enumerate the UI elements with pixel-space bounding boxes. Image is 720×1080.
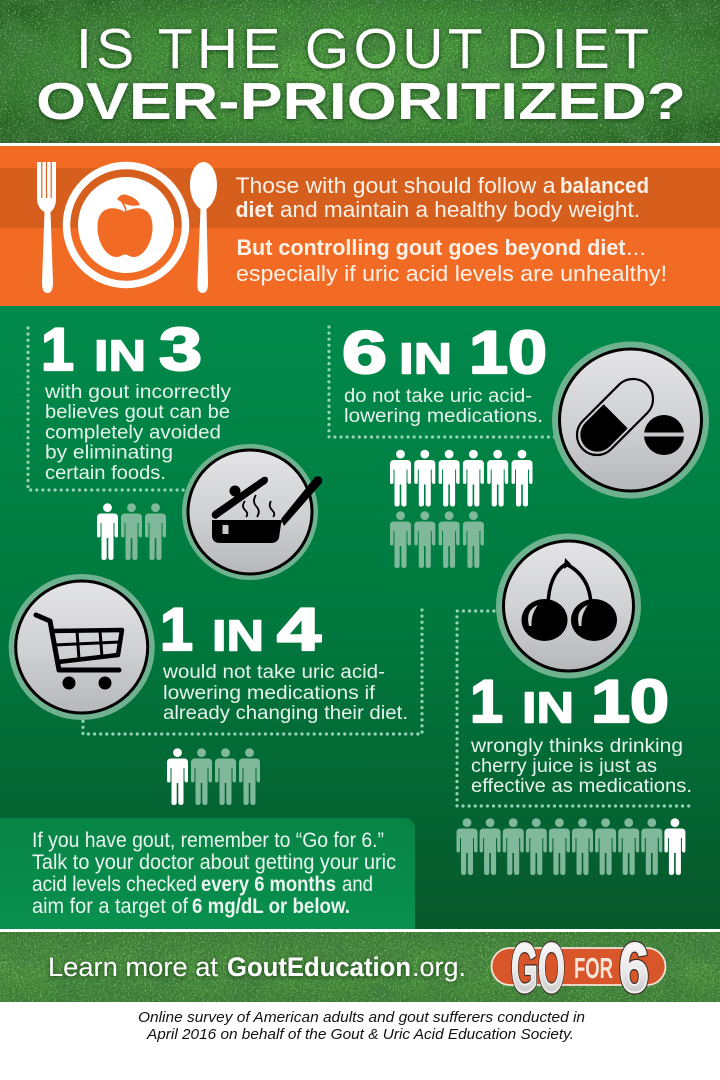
people: 6 of 10 bbox=[390, 450, 532, 568]
stat: 1 in 3 bbox=[41, 316, 322, 580]
number: 1 in 10: IN bbox=[522, 684, 574, 732]
stat: 1 in 10 bbox=[456, 534, 692, 875]
text block: 1 in 4 description: already changing their diet. bbox=[163, 703, 408, 724]
panel: orange intro bbox=[0, 146, 720, 306]
panel: green statistics bbox=[0, 306, 720, 929]
text block: 6 in 10 description: do not take uric acid- bbox=[344, 386, 532, 407]
text block: balanced diet bbox=[236, 173, 649, 222]
text block: 1 in 10 description: cherry juice is just as bbox=[471, 756, 657, 777]
logo: go for 6: GO bbox=[511, 929, 565, 1007]
number: 1 in 3: IN bbox=[94, 332, 146, 380]
icon: capsule and tablet bbox=[552, 342, 709, 498]
icon: steaming pot bbox=[182, 444, 322, 580]
dotted frame: 6 in 10 bbox=[329, 327, 562, 437]
text block: beyond diet: But controlling gout goes beyond diet bbox=[236, 235, 626, 260]
number: 6 in 10 bbox=[342, 319, 547, 386]
logo: go for 6: 6 bbox=[619, 929, 649, 1007]
icon: plate with apple bbox=[66, 166, 186, 284]
text block: 1 in 3 description: with gout incorrectly bbox=[44, 382, 232, 403]
text block: callout text: 6 mg/dL or below. bbox=[192, 895, 350, 918]
number: 1 in 3: 3 bbox=[159, 316, 202, 383]
footer: grass banner bbox=[0, 932, 720, 1002]
icon: fork bbox=[37, 162, 56, 293]
text block: callout text: If you have gout, remember to “Go for 6.” bbox=[32, 829, 384, 852]
footnote: Online survey of American adults and gout sufferers conducted in bbox=[138, 1009, 585, 1026]
text block: 6 in 10 description: lowering medications. bbox=[344, 406, 543, 427]
text block: balanced diet: and maintain a healthy body weight. bbox=[280, 197, 640, 222]
footnote bbox=[138, 1009, 585, 1043]
number: 1 in 10 bbox=[470, 668, 669, 735]
text block: callout text bbox=[32, 829, 396, 918]
number: 1 in 4: 1 bbox=[160, 596, 193, 663]
text block: 1 in 4 description: lowering medications if bbox=[163, 683, 376, 704]
title: IS THE GOUT DIET bbox=[76, 17, 649, 81]
number: 1 in 3 bbox=[41, 316, 202, 383]
icon: cherries bbox=[496, 534, 641, 678]
text block: 1 in 10 description: wrongly thinks drinking bbox=[470, 736, 683, 757]
footnote: April 2016 on behalf of the Gout & Uric Acid Education Society. bbox=[146, 1026, 574, 1043]
text block: beyond diet: especially if uric acid levels are unhealthy! bbox=[236, 261, 667, 286]
logo: go for 6 bbox=[492, 929, 666, 1007]
text: learn more link: GoutEducation bbox=[227, 952, 411, 982]
stat: 1 in 4 bbox=[9, 574, 408, 805]
dotted frame: 1 in 3 bbox=[28, 328, 187, 490]
number: 6 in 10: 6 bbox=[342, 319, 387, 386]
icon: spoon bbox=[190, 162, 217, 293]
text: learn more link: .org. bbox=[412, 952, 466, 982]
text block: 1 in 3 description: certain foods. bbox=[45, 463, 166, 484]
text block: 1 in 4 description bbox=[162, 662, 408, 724]
text: learn more link bbox=[48, 952, 466, 982]
people: 1 of 3 bbox=[97, 503, 166, 560]
title: OVER-PRIORITIZED? bbox=[36, 73, 686, 131]
number: 1 in 4: 4 bbox=[277, 596, 322, 663]
text block: 1 in 3 description bbox=[44, 382, 232, 484]
people: 1 of 10 bbox=[456, 818, 685, 875]
text block: callout text: acid levels checked bbox=[32, 873, 197, 896]
number: 1 in 4: IN bbox=[212, 612, 264, 660]
number: 1 in 4 bbox=[160, 596, 322, 663]
text block: 6 in 10 description bbox=[344, 386, 543, 427]
text block: callout text: every 6 months bbox=[201, 873, 336, 896]
text block: beyond diet: ... bbox=[626, 235, 646, 260]
callout: go for 6 reminder bbox=[0, 818, 415, 929]
text block: balanced diet: Those with gout should follow a bbox=[236, 173, 556, 198]
dotted frame: 1 in 10 bbox=[457, 611, 694, 806]
number: 1 in 3: 1 bbox=[41, 316, 74, 383]
dotted frame: 1 in 4 bbox=[83, 610, 422, 734]
number: 1 in 10: 1 bbox=[470, 668, 503, 735]
header: grass banner bbox=[0, 0, 720, 143]
text block: 1 in 3 description: believes gout can be bbox=[45, 402, 230, 423]
text block: 1 in 10 description: effective as medications. bbox=[471, 776, 692, 797]
text block: callout text: and bbox=[342, 873, 373, 896]
text block: balanced diet: balanced bbox=[560, 173, 649, 198]
text block: 1 in 10 description bbox=[470, 736, 692, 797]
text: learn more link: Learn more at bbox=[48, 952, 219, 982]
number: 6 in 10: 10 bbox=[469, 319, 547, 386]
text block: 1 in 3 description: by eliminating bbox=[45, 442, 173, 464]
logo: go for 6: GO bbox=[511, 929, 565, 1007]
logo: go for 6: FOR bbox=[574, 953, 613, 985]
text block: 1 in 3 description: completely avoided bbox=[45, 422, 221, 444]
icon: shopping cart bbox=[9, 574, 155, 720]
title bbox=[36, 17, 686, 131]
number: 6 in 10: IN bbox=[399, 334, 452, 384]
text block: callout text: Talk to your doctor about getting your uric bbox=[32, 851, 396, 874]
number: 1 in 10: 10 bbox=[591, 668, 669, 735]
logo: go for 6: 6 bbox=[619, 929, 649, 1007]
people: 1 of 4 bbox=[167, 748, 260, 805]
text block: 1 in 4 description: would not take uric acid- bbox=[162, 662, 385, 683]
text block: beyond diet bbox=[236, 235, 667, 286]
stat: 6 in 10 bbox=[342, 319, 709, 568]
text block: callout text: aim for a target of bbox=[32, 895, 188, 918]
text block: balanced diet: diet bbox=[236, 197, 274, 222]
